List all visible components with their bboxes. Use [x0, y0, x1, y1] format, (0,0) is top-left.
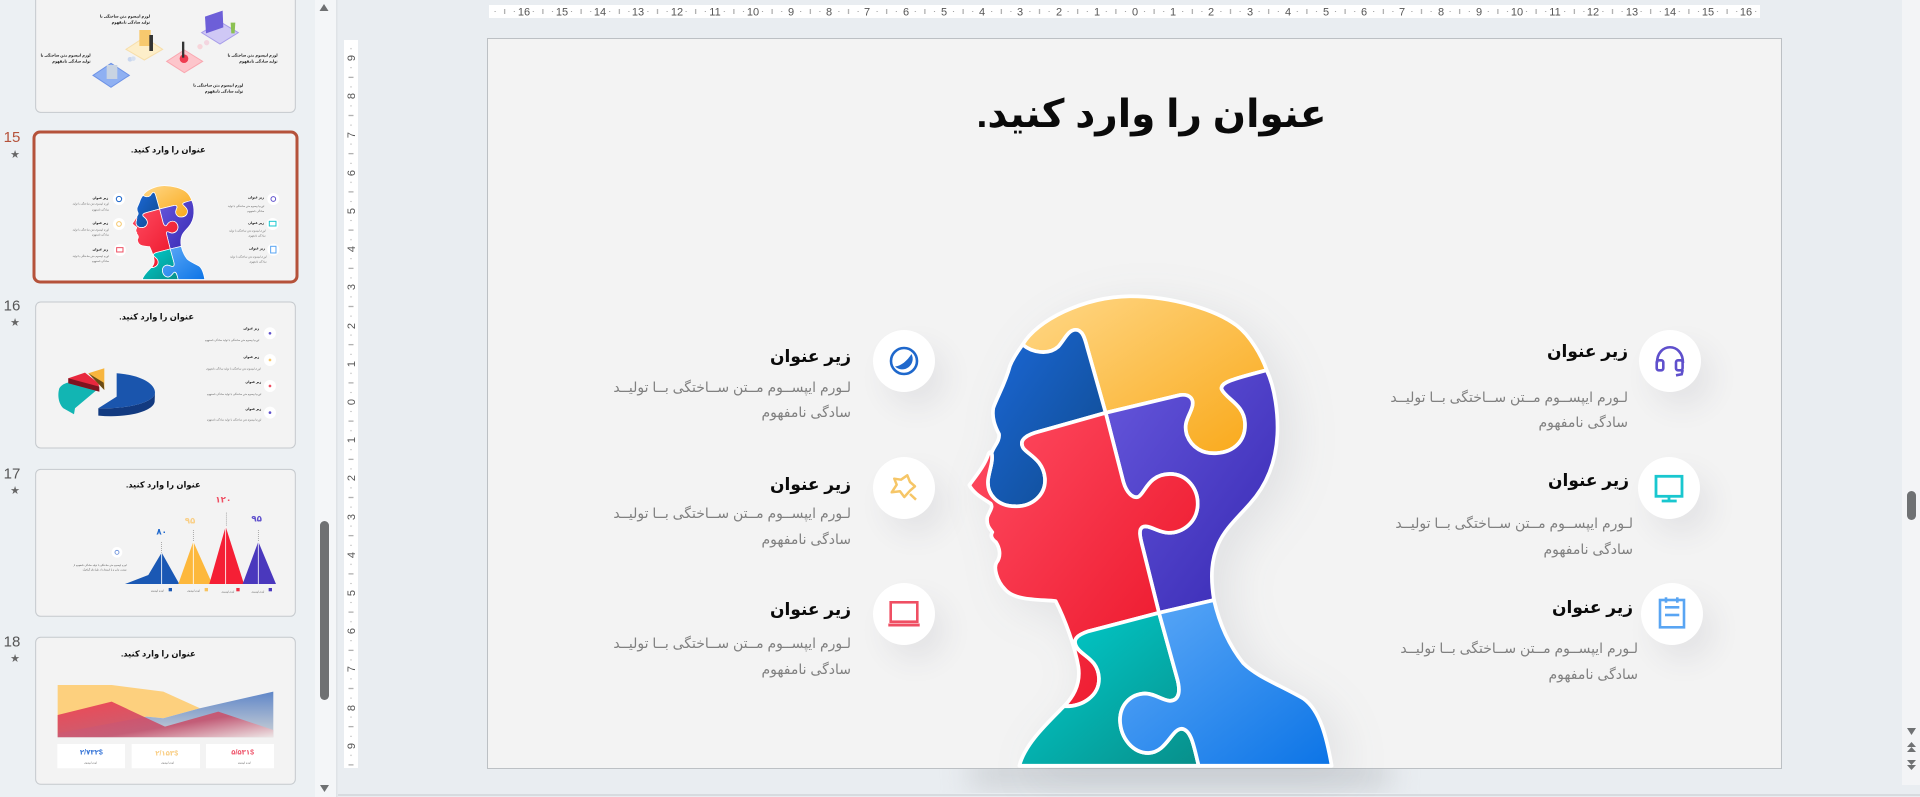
- thumbnail 16: لورم ایپسوم متن ساختگی با تولید سادگی نامفهوم: [207, 417, 261, 422]
- pie chart: [58, 368, 155, 416]
- horizontal ruler: 5: [1323, 6, 1329, 18]
- icon: laptop: [873, 583, 935, 645]
- horizontal ruler: 12: [671, 6, 683, 18]
- vertical ruler: 9: [346, 55, 358, 61]
- body text: لـورم ایپســوم مــتن ســاختگی بــا تولیــد: [613, 505, 851, 521]
- thumbnail 15 active: عنوان را وارد کنید.: [131, 145, 206, 156]
- vertical ruler: 6: [346, 170, 358, 176]
- body text line 2: سادگی نامفهوم: [1538, 414, 1628, 430]
- thumbnail 14: تولید سادگی نامفهوم: [52, 58, 91, 63]
- thumbnail 18: لورم ایپسوم: [238, 761, 251, 764]
- subtitle: زیر عنوان: [770, 600, 851, 619]
- horizontal ruler: 13: [1626, 6, 1638, 18]
- thumbnail 16: لورم ایپسوم متن ساختگی با تولید سادگی نامفهوم: [205, 338, 259, 343]
- thumbnail 15 active: زیر عنوان: [248, 221, 264, 225]
- horizontal ruler: 15: [1702, 6, 1714, 18]
- head puzzle graphic: [968, 294, 1340, 774]
- vertical ruler: 1: [346, 437, 358, 443]
- thumbnail 18: ★: [10, 653, 20, 665]
- thumbnail 18: ۵/۵۳۱$: [231, 750, 254, 757]
- body text line 2: سادگی نامفهوم: [761, 404, 851, 420]
- vertical ruler: 4: [346, 246, 358, 252]
- thumbnail 15 active: 15: [4, 129, 20, 146]
- feature: right 3: [1400, 583, 1710, 682]
- horizontal ruler: 16: [518, 6, 530, 18]
- horizontal ruler: 9: [788, 6, 794, 18]
- horizontal ruler: 14: [594, 6, 606, 18]
- horizontal ruler: 3: [1247, 6, 1253, 18]
- horizontal ruler: 8: [1438, 6, 1444, 18]
- horizontal ruler: 6: [903, 6, 909, 18]
- horizontal ruler: 1: [1170, 6, 1176, 18]
- horizontal ruler: 8: [826, 6, 832, 18]
- horizontal ruler: 12: [1587, 6, 1599, 18]
- horizontal ruler: 10: [1511, 6, 1523, 18]
- thumbnail 16: 16: [4, 298, 20, 315]
- horizontal ruler: 0: [1132, 6, 1138, 18]
- thumbnail 15 active: زیر عنوان: [248, 195, 264, 199]
- vertical ruler: 2: [346, 475, 358, 481]
- thumbnail 15 active: لورم ایپسوم متن ساختگی با تولید: [230, 255, 267, 260]
- vertical ruler: 8: [346, 93, 358, 99]
- thumbnail 16: زیر عنوان: [245, 407, 261, 411]
- thumbnail 14: تولید سادگی نامفهوم: [205, 88, 244, 93]
- triangle chart: ۸۰: [156, 527, 167, 537]
- feature: left 2: [613, 457, 942, 548]
- horizontal ruler: 3: [1017, 6, 1023, 18]
- thumbnail 18: ۲/۷۳۲$: [80, 750, 103, 757]
- thumbnail 14: تولید سادگی نامفهوم: [239, 58, 278, 63]
- subtitle: زیر عنوان: [1548, 471, 1629, 490]
- vertical ruler: 1: [346, 361, 358, 367]
- vertical ruler: 6: [346, 628, 358, 634]
- thumbnail 14: لورم ایپسوم متن ساختگی با: [41, 52, 91, 57]
- horizontal ruler: 4: [979, 6, 985, 18]
- feature: right 1: [1390, 330, 1708, 430]
- horizontal ruler: 7: [864, 6, 870, 18]
- icon: headset: [1639, 330, 1701, 392]
- subtitle: زیر عنوان: [770, 475, 851, 494]
- thumbnail 15 active: سادگی نامفهوم: [249, 234, 266, 239]
- horizontal ruler: 4: [1285, 6, 1291, 18]
- triangle chart: لورم ایپسوم: [187, 589, 200, 592]
- thumbnail 17: لورم ایپسوم متن ساختگی با تولید سادگی نامفهوم از: [72, 563, 127, 567]
- bottom divider line: [338, 794, 1920, 796]
- horizontal ruler: [489, 5, 1760, 18]
- right scrollbar strip: [1902, 0, 1920, 785]
- vertical ruler: 0: [346, 399, 358, 405]
- horizontal ruler: 14: [1664, 6, 1676, 18]
- subtitle: زیر عنوان: [1547, 342, 1628, 361]
- thumbnail 15 active: [4, 129, 297, 282]
- feature: left 1: [613, 330, 942, 420]
- horizontal ruler: 1: [1094, 6, 1100, 18]
- thumbnail pane: [4, 0, 338, 797]
- body text: لـورم ایپســوم مــتن ســاختگی بــا تولیــد: [1400, 640, 1638, 656]
- thumbnail 16: عنوان را وارد کنید.: [119, 311, 194, 322]
- thumbnail 15 active: لورم ایپسوم متن ساختگی با تولید: [229, 229, 266, 234]
- thumbnail 18: [4, 634, 295, 784]
- horizontal ruler: 6: [1361, 6, 1367, 18]
- triangle chart: لورم ایپسوم: [222, 590, 235, 593]
- scrollbar: thumbnail pane: [320, 4, 329, 792]
- horizontal ruler: 15: [556, 6, 568, 18]
- body text: لـورم ایپســوم مــتن ســاختگی بــا تولیــد: [613, 635, 851, 651]
- thumbnail 15 active: زیر عنوان: [249, 246, 265, 250]
- thumbnail 16: ★: [10, 317, 20, 329]
- thumbnail 15 active: سادگی نامفهوم: [247, 209, 264, 214]
- thumbnail 14: [36, 0, 295, 112]
- feature: left 3: [613, 583, 942, 678]
- vertical ruler: 3: [346, 514, 358, 520]
- thumbnail 15 active: لورم ایپسوم متن ساختگی با تولید: [72, 227, 109, 232]
- vertical ruler: 7: [346, 132, 358, 138]
- vertical ruler: 5: [346, 590, 358, 596]
- vertical ruler: 5: [346, 208, 358, 214]
- title: عنوان را وارد کنید.: [977, 93, 1326, 136]
- vertical ruler: 2: [346, 323, 358, 329]
- horizontal ruler: 7: [1399, 6, 1405, 18]
- triangle chart: ۹۵: [185, 516, 196, 526]
- body text line 2: سادگی نامفهوم: [761, 661, 851, 677]
- horizontal ruler: 16: [1740, 6, 1752, 18]
- thumbnail 15 active: لورم ایپسوم متن ساختگی با تولید: [72, 254, 109, 259]
- triangle chart: ۹۵: [251, 513, 263, 523]
- thumbnail 18: عنوان را وارد کنید.: [121, 648, 196, 659]
- body text line 2: سادگی نامفهوم: [761, 531, 851, 547]
- horizontal ruler: 5: [941, 6, 947, 18]
- thumbnail 15 active: سادگی نامفهوم: [250, 260, 267, 265]
- thumbnail 14: تولید سادگی نامفهوم: [112, 19, 151, 24]
- thumbnail 15 active: سادگی نامفهوم: [92, 259, 109, 264]
- thumbnail 17: ★: [10, 485, 20, 497]
- thumbnail 14: لورم ایپسوم متن ساختگی با: [100, 13, 151, 18]
- horizontal ruler: 2: [1056, 6, 1062, 18]
- subtitle: زیر عنوان: [1552, 598, 1633, 617]
- thumbnail 15 active: سادگی نامفهوم: [92, 232, 109, 237]
- thumbnail 18: ۲/۱۵۳$: [155, 750, 178, 757]
- thumbnail 17: صنعت چاپ و با استفاده از طراحان گرافیک: [83, 568, 127, 572]
- thumbnail 15 active: سادگی نامفهوم: [92, 207, 109, 212]
- feature: right 2: [1395, 457, 1707, 558]
- triangle chart: [125, 494, 276, 593]
- thumbnail 16: لورم ایپسوم متن ساختگی با تولید سادگی نامفهوم: [206, 366, 261, 371]
- horizontal ruler: 2: [1208, 6, 1214, 18]
- thumbnail 17: [4, 466, 295, 616]
- vertical ruler: 3: [346, 284, 358, 290]
- body text: لـورم ایپســوم مــتن ســاختگی بــا تولیــد: [613, 379, 851, 395]
- vertical ruler: 9: [346, 743, 358, 749]
- body text: لـورم ایپســوم مــتن ســاختگی بــا تولیــد: [1390, 389, 1628, 405]
- triangle chart: لورم ایپسوم: [252, 590, 265, 593]
- triangle chart: لورم ایپسوم: [151, 590, 164, 593]
- thumbnail 15 active: ★: [10, 149, 20, 161]
- soft shadow under head on workspace: [966, 769, 1394, 793]
- horizontal ruler: 10: [747, 6, 759, 18]
- thumbnail 18: 18: [4, 634, 20, 651]
- icon: star: [873, 457, 935, 519]
- body text line 2: سادگی نامفهوم: [1543, 541, 1633, 557]
- thumbnail 15 active: لورم ایپسوم متن ساختگی با تولید: [228, 204, 264, 209]
- thumbnail 15 active: لورم ایپسوم متن ساختگی با تولید: [72, 202, 109, 207]
- icon: moon circle: [873, 330, 935, 392]
- vertical ruler: 8: [346, 705, 358, 711]
- thumbnail 16: زیر عنوان: [243, 326, 259, 330]
- horizontal ruler: 11: [1549, 6, 1561, 18]
- icon: notepad: [1641, 583, 1703, 645]
- thumbnail 18: لورم ایپسوم: [84, 761, 97, 764]
- thumbnail 18: لورم ایپسوم: [161, 761, 174, 764]
- horizontal ruler: 13: [632, 6, 644, 18]
- thumbnail 15 active: زیر عنوان: [92, 221, 108, 225]
- thumbnail 15 active: زیر عنوان: [92, 247, 108, 251]
- horizontal ruler: 9: [1476, 6, 1482, 18]
- panel: main slide: [487, 38, 1782, 769]
- vertical ruler: [344, 40, 358, 768]
- thumbnail 16: لورم ایپسوم متن ساختگی با تولید سادگی نامفهوم: [207, 392, 261, 397]
- vertical ruler: 4: [346, 552, 358, 558]
- thumbnail 14: لورم ایپسوم متن ساختگی با: [228, 52, 278, 57]
- thumbnail 14: لورم ایپسوم متن ساختگی با: [193, 83, 244, 88]
- thumbnail 15 active: زیر عنوان: [92, 196, 108, 200]
- thumbnail 17: 17: [4, 466, 20, 483]
- thumbnail 17: عنوان را وارد کنید.: [126, 479, 201, 490]
- body text: لـورم ایپســوم مــتن ســاختگی بــا تولیــد: [1395, 515, 1633, 531]
- thumbnail 16: [4, 298, 295, 448]
- icon: monitor: [1638, 457, 1700, 519]
- subtitle: زیر عنوان: [770, 347, 851, 366]
- horizontal ruler: 11: [709, 6, 721, 18]
- thumbnail 16: زیر عنوان: [245, 380, 261, 384]
- body text line 2: سادگی نامفهوم: [1548, 666, 1638, 682]
- thumbnail 16: زیر عنوان: [243, 355, 259, 359]
- vertical ruler: 7: [346, 666, 358, 672]
- triangle chart: ۱۲۰: [215, 494, 231, 504]
- area chart: [58, 685, 273, 737]
